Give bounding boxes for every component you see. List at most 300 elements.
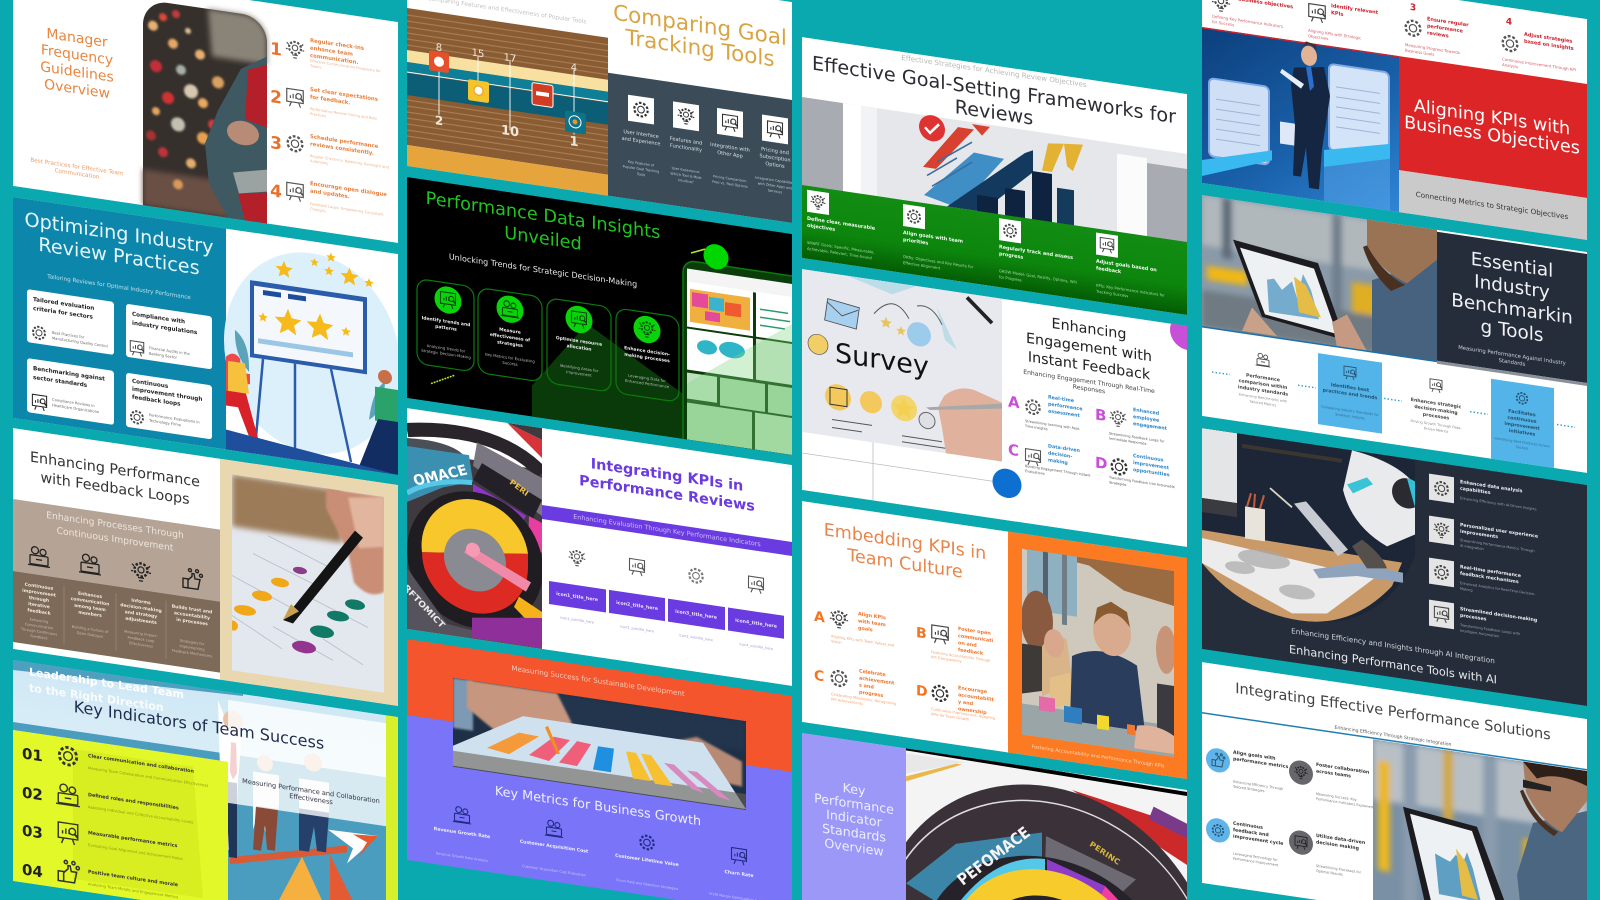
slide: Essential Industry Benchmarking Tools <box>1202 195 1587 473</box>
list item 2: Performance Review Timing and Best <box>310 107 378 121</box>
list item 4: Encourage open dialogue <box>310 181 387 198</box>
red title panel: Aligning KPIs with <box>1414 96 1570 139</box>
photo: timeline graphic: 15 <box>472 48 484 60</box>
card 4: improvement through <box>132 387 202 403</box>
step 4: initiatives <box>1509 428 1535 438</box>
step 3 <box>1410 376 1462 436</box>
list item 3: 3 <box>270 133 282 155</box>
item C <box>814 662 896 711</box>
subtitle: Effective Strategies for Achieving Review Objectives <box>901 53 1087 89</box>
step 1: industry standards <box>1238 384 1288 398</box>
card 3: Healthcare Organizations <box>52 403 99 414</box>
KPI step 4: Analysis <box>1502 62 1518 69</box>
feature 4: Services <box>768 188 782 195</box>
photo: timeline graphic <box>407 8 608 196</box>
item D: opportunities <box>1133 467 1170 478</box>
subtitle: Measuring Success for Sustainable Development <box>511 663 685 698</box>
title: Key Metrics for Business Growth <box>495 784 701 830</box>
insight card 2: effectiveness of <box>490 332 530 344</box>
band: four benefit columns: decision-making <box>120 602 162 614</box>
band: four benefit columns: Continuous <box>25 582 54 592</box>
slide: Enhancing Engagement with Instant Feedback <box>802 257 1206 550</box>
feature 1: Popular Goal Tracking <box>623 164 659 174</box>
indicator 01: Clear communication and collaboration <box>88 753 194 775</box>
dark title panel: Measuring Performance Against Industry <box>1458 345 1566 367</box>
item A: goals <box>858 625 873 633</box>
step 1: Performance <box>1246 373 1280 384</box>
feature 4: Options <box>765 161 785 170</box>
item C: C <box>1008 441 1019 460</box>
band: four benefit columns: adjustments <box>125 616 157 626</box>
step 4: continuous <box>1507 415 1537 425</box>
feature 2: Intuitive? <box>678 178 694 184</box>
dashboard tablet <box>683 260 813 479</box>
illustration: rating board with people <box>224 237 400 475</box>
feature 3: Making <box>1460 587 1473 593</box>
card 4 <box>126 373 212 439</box>
card 2 <box>126 304 212 369</box>
metric 1: Revenue Growth Rate <box>434 826 490 840</box>
card 3: Compliance Reviews in <box>52 398 95 408</box>
purple title panel <box>802 733 906 900</box>
KPI step 2: Identify relevant <box>1331 3 1379 16</box>
item A <box>1008 389 1083 437</box>
item C: Celebrating Milestones: Recognizing <box>831 692 896 706</box>
green dot <box>704 242 728 271</box>
banner text: Leadership to Lead Team <box>29 665 184 701</box>
KPI step 4: Continuous Improvement Through KPI <box>1502 56 1576 72</box>
magenta corner <box>1170 311 1206 353</box>
feature 3 <box>710 107 750 189</box>
card 2: industry regulations <box>132 321 198 336</box>
item A: Streamlining Learning with Real- <box>1025 419 1081 431</box>
photo: timeline graphic: 4 <box>571 62 577 74</box>
item B: Fostering Accountability Through <box>931 650 990 663</box>
framework 1: SMART Goals: Specific, Measurable, <box>807 240 875 255</box>
photo: survey sketch with hand: Survey <box>835 338 929 383</box>
feature 3: Pricing Comparison: <box>713 174 747 183</box>
step 4: Identifying Best Practices Across <box>1494 436 1550 448</box>
item A: A <box>814 609 825 626</box>
KPI 3: icon3_title_here <box>675 609 717 621</box>
card 2: Financial Audits in the <box>149 346 190 356</box>
framework 4: Tracking Success <box>1095 288 1128 298</box>
indicator 01: Measuring Team Collaboration and Communication Effectiveness <box>88 766 208 788</box>
subtitle: Enhancing Engagement Through Real-Time <box>1023 369 1155 395</box>
step 2: Comparing Industry Standards for <box>1321 405 1379 417</box>
solution 4: Utilize data-driven <box>1316 833 1365 846</box>
slide: Key Indicators of Team Success <box>13 660 398 900</box>
insight card 4: Leveraging Data for <box>628 373 666 383</box>
photo: performance gauge: RFTOMICT <box>401 584 447 631</box>
indicator 01: 01 <box>22 744 43 765</box>
framework 1: objectives <box>807 223 835 233</box>
orange photo panel <box>1008 531 1187 779</box>
list item 2 <box>271 87 378 120</box>
band: four benefit columns: Enhances <box>78 591 102 600</box>
solution 2: Foster collaboration <box>1316 762 1369 776</box>
item C: Data-driven <box>1048 443 1080 454</box>
item D <box>1095 447 1175 494</box>
item A: A <box>1008 393 1020 412</box>
framework 2: Effective Alignment <box>903 260 941 271</box>
photo: businessman with tablets <box>1202 26 1399 212</box>
KPI step 2: Objectives <box>1308 33 1328 41</box>
solution 1 <box>1206 746 1288 797</box>
title: with Feedback Loops <box>40 470 190 508</box>
framework 3: progress <box>999 251 1023 261</box>
list item 3: Schedule performance <box>310 134 379 150</box>
title: Performance Data Insights <box>426 188 660 243</box>
purple title panel: Performance <box>814 790 894 817</box>
item C: decision- <box>1048 450 1072 460</box>
step 1 <box>1238 350 1288 409</box>
KPI step 4: 4 <box>1506 17 1512 28</box>
insight card 3: Improvement <box>566 369 592 378</box>
feature 1: Enhanced data analysis <box>1460 479 1523 494</box>
step 3: processes <box>1423 412 1449 422</box>
step 1: comparison within <box>1239 378 1287 391</box>
item D: KPIs for Team Growth <box>931 712 969 722</box>
item C: KPI Achievements <box>831 697 863 706</box>
KPI step 2: KPIs <box>1331 10 1343 18</box>
dark title panel: Standards <box>1499 358 1526 368</box>
feature 4 <box>1429 600 1537 644</box>
item D: Strategies <box>1109 480 1127 487</box>
insight card 2: Success <box>502 360 518 367</box>
caption: Fostering Accountability and Performance Through KPIs <box>1032 744 1165 770</box>
band: four benefit columns <box>13 571 220 673</box>
list item 1: Effective Communication Frequency for <box>310 59 381 74</box>
feature 2: Which Tool Is Most <box>670 172 702 180</box>
item B: on and <box>958 640 977 649</box>
title: Integrating KPIs in <box>591 456 743 495</box>
solution 3 <box>1206 817 1283 868</box>
feature 3: Integration with <box>710 142 750 154</box>
band: four benefit columns: Strategies for <box>180 639 205 646</box>
insight card 1: Identify trends and <box>422 315 470 328</box>
KPI 4 <box>728 573 784 653</box>
feature 4: Intelligent Automation <box>1460 629 1499 638</box>
item B: employee <box>1133 414 1160 424</box>
metric 4: Churn Rate <box>725 869 753 879</box>
photo: performance gauge: PERI <box>508 478 530 498</box>
title: Manager <box>46 26 108 51</box>
photo: timeline graphic: 17 <box>504 52 516 65</box>
subtitle: Best Practices for Effective Team <box>30 158 124 177</box>
title: Overview <box>44 77 110 102</box>
solution 4: Streamlining Processes for <box>1316 864 1362 875</box>
framework 4: Adjust goals based on <box>1096 259 1157 274</box>
feature 4 <box>755 114 795 196</box>
framework 4 <box>1091 228 1187 315</box>
indicator 01 <box>22 746 208 787</box>
photo: timeline graphic: 8 <box>436 42 442 54</box>
insight card 1: Strategic Decision-Making <box>421 348 471 360</box>
slide: Embedding KPIs in Team Culture <box>802 501 1187 779</box>
photo: timeline graphic: 1 <box>569 134 579 150</box>
KPI 2 <box>609 555 665 635</box>
title: Embedding KPIs in <box>824 520 986 564</box>
lime panel <box>13 730 228 900</box>
card 3: Benchmarking against <box>33 366 105 383</box>
framework 1: Define clear, measurable <box>807 216 876 232</box>
item D: Continuous <box>1133 453 1164 464</box>
dark title panel <box>1437 232 1587 386</box>
indicator 02 <box>22 784 193 824</box>
title: Reviews <box>955 95 1033 130</box>
photo: performance gauge: OMACE <box>411 462 470 490</box>
KPI step 4: Adjust strategies <box>1524 32 1572 45</box>
insight card 1 <box>417 278 474 372</box>
photo: gauge on desk: PERINC <box>1088 840 1122 867</box>
KPI step 2 <box>1308 0 1379 49</box>
slide: Integrating Effective Performance Solutions <box>1202 662 1587 900</box>
item D: Continuous Improvement: Adapting <box>931 707 995 721</box>
photo: timeline graphic: 2 <box>435 113 443 128</box>
photo: engineer with tablet <box>1373 739 1587 900</box>
feature 3 <box>1429 558 1536 602</box>
KPI step 3: performance <box>1427 23 1464 35</box>
band: four benefit columns: and strategy <box>125 609 157 620</box>
insight card 3 <box>547 298 611 392</box>
KPI step 3: Measuring Progress Towards <box>1405 42 1460 55</box>
item A: Time Insights <box>1024 424 1048 431</box>
list item 2: for feedback. <box>310 94 350 106</box>
band: four benefit columns: Enhancing <box>30 617 48 624</box>
slide: Aligning KPIs with Business Objectives <box>1202 0 1587 240</box>
card 4: feedback loops <box>132 395 181 408</box>
purple title panel: Overview <box>824 835 884 859</box>
card 4: Performance Evaluations in <box>149 413 200 425</box>
band: four benefit columns: Informs <box>131 598 151 606</box>
KPI 2: icon2_subtitle_here <box>620 625 654 634</box>
KPI step 3: Business Goals <box>1405 48 1434 57</box>
indicator 02: Assessing Individual and Collective Accountability Levels <box>88 805 193 825</box>
title: Enhancing <box>1052 316 1126 343</box>
KPI 4: icon4_subtitle_here <box>739 642 773 651</box>
band: four benefit columns: Measuring Impact: <box>124 629 158 638</box>
subtitle band <box>542 505 792 556</box>
list item 1: communication. <box>310 53 358 66</box>
list item 1: enhance team <box>310 45 353 58</box>
item B: feedback <box>958 647 984 657</box>
list item 4: Feedback Loops: Empowering Consistent <box>310 202 384 217</box>
photo panel: pen on checklist <box>220 459 398 706</box>
band: four benefit columns: improvement <box>22 588 57 599</box>
lime stripe <box>386 715 398 900</box>
band: four benefit columns: Builds trust and <box>172 604 212 615</box>
band: four benefit columns: members <box>78 610 102 619</box>
list item 4: Changes <box>310 207 326 213</box>
indicator 03 <box>22 821 182 860</box>
indicator 02: 02 <box>22 783 43 804</box>
photo: person by holiday tree <box>143 0 267 224</box>
squiggle accents <box>431 209 705 424</box>
photo: robot sketching at desk <box>1202 428 1423 639</box>
blue dot <box>992 467 1022 500</box>
feature 1: User Interface <box>623 129 659 140</box>
slide: Effective Goal-Setting Frameworks for Reviews <box>802 37 1187 315</box>
KPI 1: icon1_title_here <box>556 591 598 603</box>
step 1: Enhancing Benchmarks with <box>1239 392 1287 404</box>
step 3: Driven Metrics <box>1424 426 1449 434</box>
item B <box>1095 401 1168 449</box>
framework 2: priorities <box>903 237 928 247</box>
insight card 4: Enhance decision- <box>624 345 670 358</box>
list item 3: Regular Check-Ins: Balancing Oversight and <box>310 154 389 170</box>
KPI 1 <box>549 547 606 626</box>
grey subtitle panel: Connecting Metrics to Strategic Objectives <box>1416 190 1568 221</box>
subtitle: Communication <box>55 168 100 181</box>
solution 1: performance metrics <box>1233 756 1288 770</box>
list item 4: 4 <box>270 181 282 203</box>
insight card 2: Measure <box>499 327 521 336</box>
item D <box>916 679 995 726</box>
item A: Real-time <box>1048 394 1075 404</box>
solution 1: Align goals with <box>1233 750 1276 762</box>
card 4: Technology Firms <box>148 418 181 427</box>
framework 3: GROW Model: Goal, Reality, Options, Will <box>999 268 1077 285</box>
KPI step 1: Defining Key Performance Indicators <box>1212 14 1283 29</box>
KPI 1: icon1_subtitle_here <box>560 616 594 625</box>
title: Review Practices <box>38 233 200 280</box>
band: subtitle and icons: Enhancing Processes Through <box>46 510 184 541</box>
step 4: Sectors <box>1516 445 1529 451</box>
subtitle: Responses <box>1073 384 1105 395</box>
framework 2 <box>898 199 994 286</box>
solution 1: Enhancing Efficiency Through <box>1233 780 1283 791</box>
band: four benefit columns: Feedback <box>30 634 48 641</box>
title: Integrating Effective Performance Solutions <box>1235 680 1551 744</box>
title: Effective Goal-Setting Frameworks for <box>812 52 1176 128</box>
insight card 2 <box>478 288 542 382</box>
framework 3: Regularly track and assess <box>999 244 1073 261</box>
feature 1: Tools <box>636 172 645 177</box>
insight card 3: Optimize resource <box>556 335 602 348</box>
grey subtitle panel <box>1399 170 1587 240</box>
solution 2: Performance Indicators Explained <box>1316 797 1373 809</box>
card 1: Manufacturing Quality Control <box>52 336 108 349</box>
photo: gauge on desk: PEFOMACE <box>954 823 1034 889</box>
step 2 <box>1318 353 1382 434</box>
step 3: decision-making <box>1414 404 1458 416</box>
title: Tracking Tools <box>624 25 775 72</box>
KPI step 3: 3 <box>1410 3 1416 14</box>
list item 3 <box>271 134 389 168</box>
KPI step 4 <box>1502 16 1576 78</box>
item D: D <box>1095 453 1107 473</box>
KPI 4: icon4_title_here <box>735 618 777 630</box>
photo: engineer with tablet <box>1202 195 1437 362</box>
insight card 3: allocation <box>567 343 591 353</box>
KPI step 3 <box>1405 2 1469 62</box>
title: Performance Reviews <box>579 473 755 515</box>
purple title panel: Standards <box>822 821 886 845</box>
feature 1: and Experience <box>622 136 660 147</box>
item A: with team <box>858 618 886 628</box>
solution 3: improvement cycle <box>1233 834 1283 847</box>
metric 1 <box>434 803 490 863</box>
item A: Align KPIs <box>858 611 886 621</box>
card 2: Banking Sector <box>149 352 178 360</box>
photo: gauge on desk <box>875 744 1219 900</box>
list item 2: Practices <box>310 112 326 118</box>
slide: Key Performance Indicator Standards Overview <box>802 733 1219 900</box>
metric 2 <box>520 816 589 878</box>
item C: C <box>814 668 824 685</box>
solution 2 <box>1289 758 1373 809</box>
card 1: Best Practices for <box>52 331 85 340</box>
feature 1: Key Features of <box>628 160 655 168</box>
insight card 2: Key Metrics for Evaluating <box>485 352 535 364</box>
indicator 02: Defined roles and responsibilities <box>88 792 179 812</box>
band: four benefit columns: Implementing <box>180 644 204 652</box>
red title panel: Business Objectives <box>1404 113 1580 159</box>
card 1: Tailored evaluation <box>33 297 94 312</box>
feature 4: Integration Capabilities <box>755 176 795 185</box>
feature 2: Functionality <box>670 143 702 154</box>
item D: Transforming Feedback into Actionable <box>1108 475 1175 489</box>
metric 3: Churn Rate and Retention Strategies <box>616 878 678 891</box>
item B: B <box>916 625 927 642</box>
feature 4: processes <box>1460 613 1487 623</box>
KPI step 2: Aligning KPIs with Strategic <box>1308 28 1361 41</box>
title: Optimizing Industry <box>25 208 213 259</box>
feature 2: Features and <box>670 136 702 147</box>
subtitle band: Enhancing Evaluation Through Key Performance Indicators <box>573 513 761 548</box>
KPI step 1: for Success <box>1212 19 1234 27</box>
item D: accountabilit <box>958 692 994 703</box>
indicator 04: Positive team culture and morale <box>88 869 179 889</box>
title: Instant Feedback <box>1028 349 1151 384</box>
card 1 <box>27 289 114 355</box>
list item 3: Autonomy <box>310 159 329 166</box>
slide: Integrating KPIs in Performance Reviews <box>401 407 792 686</box>
item A: performance <box>1048 401 1083 413</box>
band: four benefit columns: iterative <box>28 601 50 610</box>
slide: Enhancing Performance Tools with AI <box>1202 428 1587 706</box>
insight card 1: Analyzing Trends for <box>427 343 466 354</box>
indicator 04: 04 <box>22 860 43 881</box>
purple title panel: Key <box>843 780 866 798</box>
metric 3: Customer Lifetime Value <box>615 853 679 868</box>
feature 3: feedback mechanisms <box>1460 571 1519 585</box>
step 3: Driving Growth Through Data- <box>1410 419 1462 431</box>
feature 1 <box>622 94 660 179</box>
subtitle: Unlocking Trends for Strategic Decision-Making <box>449 252 637 289</box>
framework 2: Align goals with team <box>903 230 963 245</box>
item D: Encourage <box>958 685 988 695</box>
band: four benefit columns: Feedback Mechanisms <box>172 649 212 659</box>
item A: Vision <box>831 639 842 645</box>
step 4 <box>1491 379 1554 468</box>
insight card 3: Identifying Areas for <box>560 363 599 373</box>
metric 1: Revenue Growth Rate Analysis <box>436 851 488 863</box>
band: four benefit columns: Communication <box>25 622 53 630</box>
step 1: Tailored Metrics <box>1249 399 1276 408</box>
item B: KPI Transparency <box>931 655 963 664</box>
solution 4: Optimal Results <box>1316 869 1343 877</box>
insight card 4 <box>616 308 679 402</box>
list item 1: 1 <box>270 39 282 61</box>
dark title panel: Industry <box>1474 271 1550 303</box>
item B: communicati <box>958 633 994 644</box>
title: Key Indicators of Team Success <box>74 697 324 753</box>
subtitle: Measuring Performance and Collaboration <box>242 777 380 805</box>
list item 1: Teams <box>309 64 321 70</box>
item D: y and <box>958 699 974 707</box>
